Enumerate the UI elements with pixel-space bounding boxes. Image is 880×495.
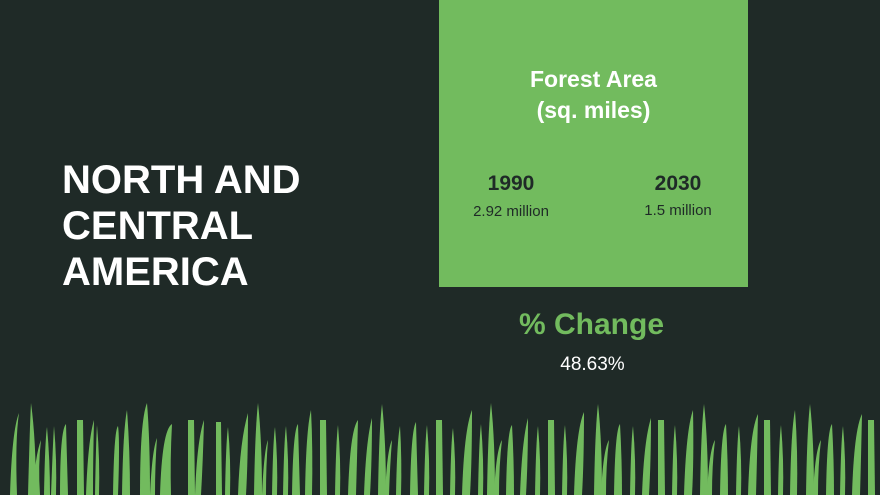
stat: 1990: 1990 [488,172,534,195]
grass [10,403,875,495]
panel heading [530,66,658,123]
panel heading: (sq. miles) [537,97,650,123]
title: AMERICA [62,250,249,294]
title: NORTH AND [62,158,300,202]
stat: 2030 [644,172,712,219]
% change value: 48.63% [560,354,625,375]
panel: forest area [439,0,748,287]
title: CENTRAL [62,204,253,248]
stat: 2030: 1.5 million [644,202,712,219]
% change heading: % Change [519,308,664,341]
panel heading: Forest Area [530,66,657,92]
stat: 2030: 2030 [655,172,701,195]
stat: 1990: 2.92 million [473,203,549,220]
title [62,158,300,294]
stat: 1990 [473,172,549,220]
